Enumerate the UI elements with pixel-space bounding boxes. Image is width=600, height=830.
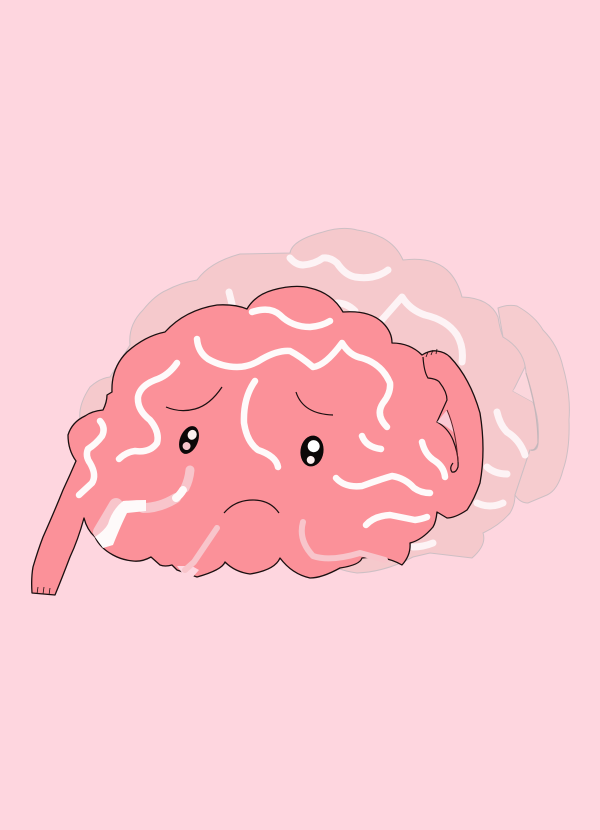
left eyebrow: [166, 387, 222, 411]
ghost arm gap: [513, 373, 533, 402]
pale wrinkles: [100, 470, 385, 570]
right eye highlight: [307, 439, 320, 453]
bottom notch: [177, 566, 199, 578]
fingers: [37, 349, 437, 595]
arm gap: [437, 410, 455, 434]
bright white streak: [95, 500, 146, 548]
left eye highlight: [186, 428, 198, 441]
white wrinkles: [79, 310, 445, 525]
ghost brain behind: [80, 228, 569, 573]
inner arm line: [423, 357, 458, 472]
left eye socket: [175, 423, 203, 457]
ghost body: [80, 228, 538, 573]
right eye lower highlight: [306, 455, 315, 464]
ghost arm fold line: [526, 373, 538, 450]
left eye: [175, 423, 203, 457]
left eye lower highlight: [181, 441, 192, 451]
arm gap line: [447, 410, 458, 462]
main brain: [32, 286, 483, 595]
brain body and arms: [32, 286, 483, 595]
ghost arm: [498, 305, 569, 503]
right eyebrow: [296, 392, 333, 415]
ghost wrinkles: [229, 258, 525, 547]
mouth: [224, 500, 279, 513]
right eye socket: [298, 434, 326, 468]
right eye: [298, 434, 326, 468]
